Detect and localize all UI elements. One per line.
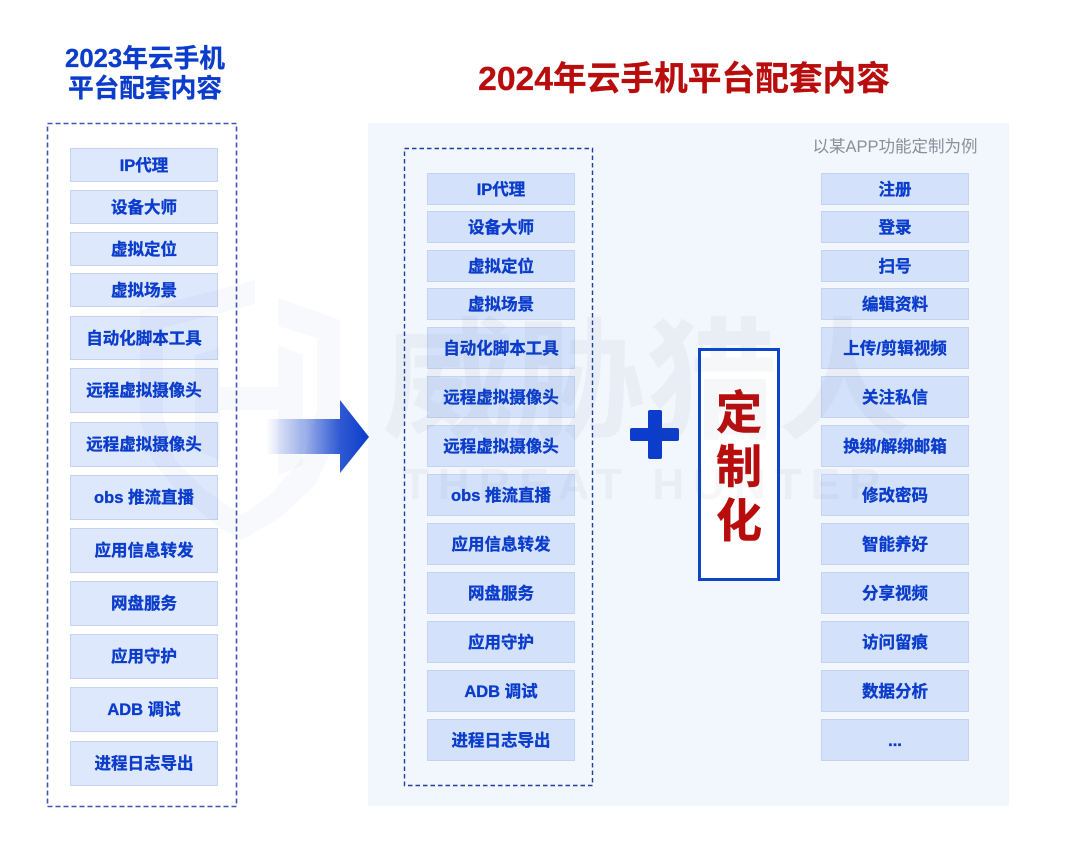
item: obs 推流直播 xyxy=(451,486,551,504)
item xyxy=(427,572,575,614)
item xyxy=(427,250,575,282)
item xyxy=(427,523,575,565)
item: IP代理 xyxy=(477,180,525,198)
item: 设备大师 xyxy=(111,198,177,216)
item: 智能养好 xyxy=(862,536,928,554)
item: obs 推流直播 xyxy=(94,489,194,507)
right background panel xyxy=(368,123,1009,806)
item xyxy=(70,422,218,467)
item: 远程虚拟摄像头 xyxy=(86,382,202,400)
item: 扫号 xyxy=(878,258,912,276)
item xyxy=(427,670,575,712)
item xyxy=(821,523,969,565)
item xyxy=(427,376,575,418)
item xyxy=(821,719,969,761)
item xyxy=(70,232,218,266)
item: 虚拟场景 xyxy=(111,282,177,300)
item: 注册 xyxy=(878,180,912,198)
item xyxy=(821,670,969,712)
item xyxy=(70,316,218,360)
item xyxy=(70,581,218,626)
item xyxy=(821,621,969,663)
callout: customization xyxy=(698,348,780,581)
item xyxy=(427,425,575,467)
item: IP代理 xyxy=(120,156,168,174)
callout: customization: 化 xyxy=(716,495,762,547)
item xyxy=(821,376,969,418)
title: 2024 platform: 2024年云手机平台配套内容 xyxy=(478,60,890,98)
item xyxy=(821,211,969,243)
item xyxy=(427,719,575,761)
item: 虚拟场景 xyxy=(468,296,534,314)
item: 应用守护 xyxy=(111,648,177,666)
item xyxy=(821,327,969,369)
item: 设备大师 xyxy=(468,218,534,236)
item xyxy=(821,288,969,320)
item xyxy=(70,273,218,307)
item: 应用信息转发 xyxy=(94,542,194,560)
item: 数据分析 xyxy=(862,682,928,700)
item: 关注私信 xyxy=(862,388,928,406)
item xyxy=(70,741,218,786)
item xyxy=(427,327,575,369)
item: 网盘服务 xyxy=(468,584,534,602)
item: ADB 调试 xyxy=(464,682,538,700)
title: 2023 platform: 2023年云手机 xyxy=(65,45,225,73)
item xyxy=(70,528,218,573)
item xyxy=(70,368,218,413)
item: 换绑/解绑邮箱 xyxy=(843,438,947,456)
item xyxy=(427,288,575,320)
item: 自动化脚本工具 xyxy=(86,330,202,348)
item xyxy=(70,687,218,732)
item xyxy=(821,474,969,516)
item xyxy=(821,572,969,614)
panel: 2024 base list xyxy=(404,148,594,786)
item xyxy=(427,173,575,205)
watermark: THREAT HUNTER xyxy=(402,460,890,509)
note: example caption: 以某APP功能定制为例 xyxy=(812,138,978,156)
item: 上传/剪辑视频 xyxy=(843,340,947,358)
item xyxy=(821,173,969,205)
callout: customization: 制 xyxy=(716,441,762,493)
icon: plus xyxy=(630,410,679,459)
item xyxy=(70,475,218,520)
item: 分享视频 xyxy=(862,584,928,602)
item: 访问留痕 xyxy=(862,634,928,652)
item: 网盘服务 xyxy=(111,595,177,613)
title: 2023 platform: 平台配套内容 xyxy=(68,75,222,103)
item: ... xyxy=(888,732,902,750)
panel: 2023 list xyxy=(46,122,238,808)
item xyxy=(821,425,969,467)
item xyxy=(427,211,575,243)
watermark: 威胁猎人 xyxy=(382,309,910,456)
watermark xyxy=(293,309,910,509)
icon: gradient arrow xyxy=(270,400,369,473)
item: 修改密码 xyxy=(862,486,928,504)
item: 远程虚拟摄像头 xyxy=(443,388,559,406)
item xyxy=(70,634,218,679)
item xyxy=(427,474,575,516)
item: 进程日志导出 xyxy=(94,755,194,773)
title: 2023 platform xyxy=(65,44,225,103)
item: 应用守护 xyxy=(468,634,534,652)
callout: customization: 定 xyxy=(716,387,762,439)
item xyxy=(427,621,575,663)
item xyxy=(70,190,218,224)
item: 虚拟定位 xyxy=(111,240,177,258)
item: 自动化脚本工具 xyxy=(443,340,559,358)
item: 远程虚拟摄像头 xyxy=(86,436,202,454)
item: 登录 xyxy=(878,218,912,236)
item: 远程虚拟摄像头 xyxy=(443,438,559,456)
item: 进程日志导出 xyxy=(452,732,550,750)
item: 虚拟定位 xyxy=(468,258,534,276)
item: 应用信息转发 xyxy=(452,536,550,554)
item: ADB 调试 xyxy=(107,701,181,719)
item xyxy=(70,148,218,182)
item: 编辑资料 xyxy=(862,296,928,314)
item xyxy=(821,250,969,282)
